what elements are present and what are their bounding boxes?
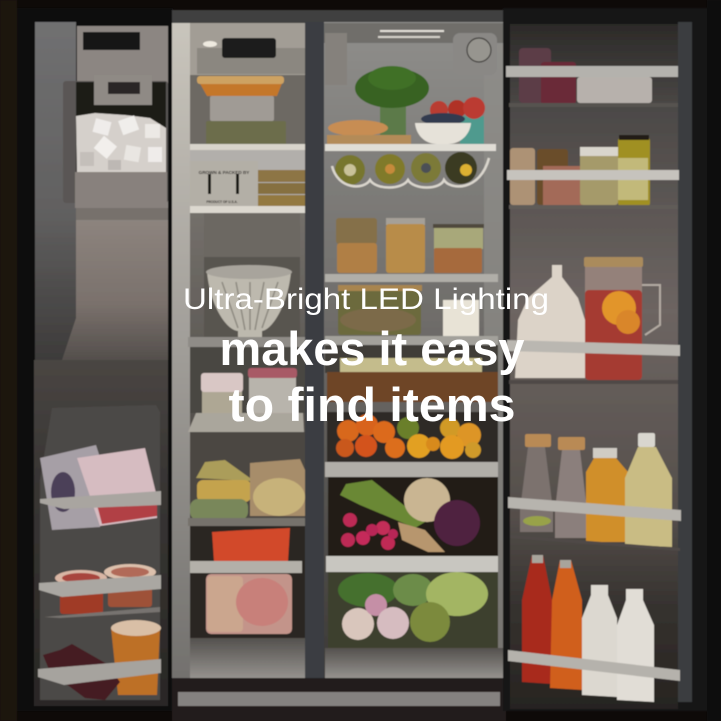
white bowl (206, 265, 292, 337)
fridge floor (325, 648, 504, 678)
glass containers (336, 218, 484, 273)
second door bin with jars (507, 135, 679, 209)
panel: fridge compartment (324, 22, 504, 682)
top door bin (506, 48, 678, 107)
panel: left freezer door (17, 8, 173, 711)
shelf 5 (188, 518, 305, 526)
shelf 1 (190, 144, 305, 150)
ceiling and vent (190, 23, 305, 75)
door bin with soup containers (39, 564, 161, 618)
shelf C (325, 336, 498, 345)
panel: right door (503, 0, 721, 721)
salad and carton (338, 285, 479, 337)
ice cubes (76, 113, 166, 172)
ice dispenser unit (63, 26, 168, 221)
wrapped food packs (258, 170, 305, 206)
line: makes it easy: makes it easy (220, 322, 524, 375)
food containers (201, 368, 297, 427)
box: grown and packed: PRODUCT OF U.S.A. (206, 200, 238, 204)
panel: center divider (305, 22, 324, 682)
shelf E (326, 556, 498, 572)
shelf D (325, 462, 498, 477)
ceiling light and fan (324, 23, 504, 85)
shelf 4 (188, 413, 304, 432)
panel: bottom kickplate (172, 678, 506, 721)
bottom door bin: sauce and milk bottles (508, 555, 680, 702)
wine rack with bottles (332, 152, 489, 188)
door bin with meat and juice (38, 620, 161, 700)
lettuce drawer (328, 572, 498, 648)
wall left of fridge (0, 0, 17, 721)
lower door recess (40, 405, 160, 700)
vegetable drawer (328, 477, 498, 556)
shelf 3 (188, 337, 305, 347)
panel: freezer compartment (172, 10, 506, 683)
fruit bowl drawer (327, 402, 498, 462)
box: grown and packed (190, 161, 258, 206)
box: grown and packed: GROWN & PACKED BY (199, 170, 249, 175)
shelf 2 (190, 206, 305, 213)
shelf B (325, 274, 498, 282)
bread on board (327, 120, 411, 144)
food: pie and containers (197, 76, 286, 145)
third door bin: milk jug and pitcher (507, 257, 680, 384)
fourth door bin: carafes and juice (508, 433, 681, 551)
line: Ultra-Bright LED Lighting: Ultra-Bright LED Lighting (183, 283, 549, 316)
freezer drawer with meat (190, 526, 305, 638)
tomatoes, blueberries, bowl (415, 97, 485, 144)
door bin with bags (40, 445, 161, 530)
parsley in vase (355, 66, 429, 136)
headline text (183, 283, 549, 431)
frozen vegetable bags (190, 459, 305, 520)
line: to find items: to find items (228, 378, 516, 431)
shelf A (325, 144, 496, 151)
tray and wooden board (327, 358, 498, 402)
freezer floor (190, 638, 305, 678)
